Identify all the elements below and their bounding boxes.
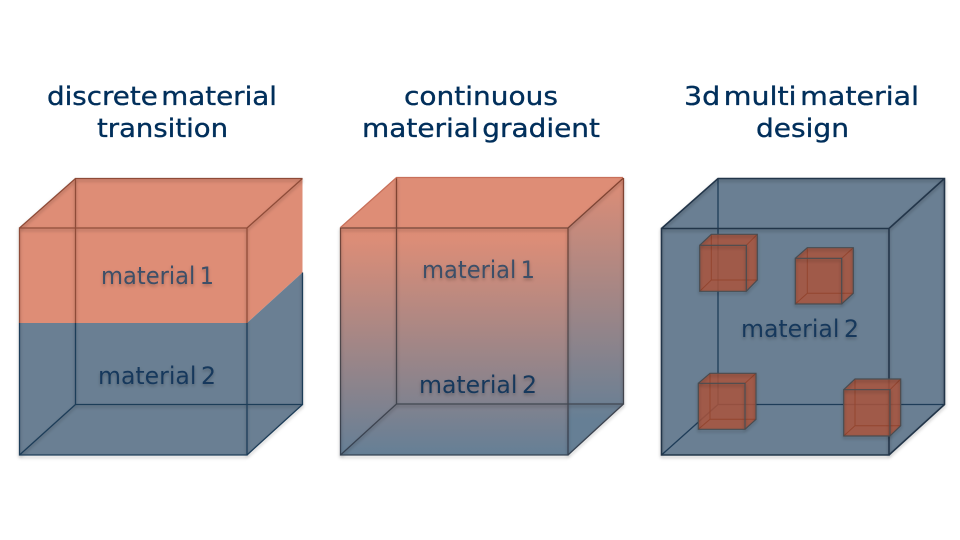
label: material 2: material 2 [741, 315, 859, 343]
title: continuous material gradient [362, 82, 600, 144]
material 2 volume [20, 272, 302, 455]
panel: discrete transition cube [20, 178, 302, 455]
outer edges [662, 178, 944, 455]
title: continuous material gradient: material gradient [362, 114, 600, 144]
inclusion cube 2 [795, 248, 853, 304]
label: material 2: material 2 [98, 362, 216, 390]
front face gradient [340, 228, 568, 455]
cube edges upper [20, 178, 302, 323]
title: discrete material transition: transition [97, 114, 228, 144]
inclusion cube 4 [844, 379, 901, 436]
blue volume [662, 178, 944, 455]
cube edges lower [20, 272, 302, 455]
title: 3d multi material design: 3d multi material [684, 82, 919, 112]
title: continuous material gradient: continuous [404, 82, 558, 112]
inner edges [662, 178, 944, 455]
title: discrete material transition [47, 82, 277, 144]
label: material 1: material 1 [101, 262, 214, 290]
label: material 1: material 1 [422, 256, 535, 284]
panel: continuous gradient cube [340, 178, 624, 455]
right face gradient [568, 178, 624, 455]
top orange edge [340, 178, 623, 228]
label: material 2: material 2 [419, 371, 537, 399]
material 1 volume [20, 178, 302, 323]
title: 3d multi material design [684, 82, 919, 144]
title: 3d multi material design: design [756, 114, 849, 144]
top face [340, 178, 624, 228]
inclusion cube 3 [698, 373, 756, 429]
cube edges [340, 178, 624, 455]
title: discrete material transition: discrete material [47, 82, 277, 112]
panel: 3d multi material cube [662, 178, 944, 455]
inclusion cube 1 [700, 234, 757, 291]
